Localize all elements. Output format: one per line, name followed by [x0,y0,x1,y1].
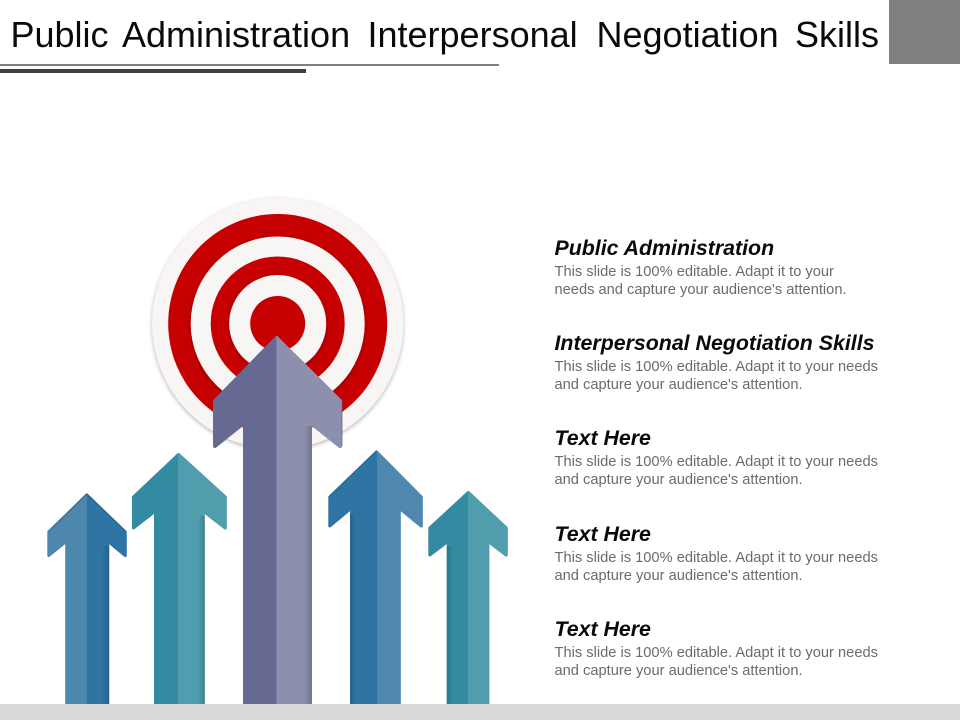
title: Public [10,14,109,55]
target and arrows graphic [47,197,508,704]
text block 5 [554,617,878,679]
corner block [889,0,960,64]
footer bar [0,704,960,720]
icon: target [152,198,403,449]
text block 3: This slide is 100% editable. Adapt it to your needs [554,454,878,470]
title underline thick [0,69,306,73]
text block 1 [554,236,847,298]
text block 1: needs and capture your audience's attention. [554,282,847,298]
text block 4: Text Here [554,522,651,546]
title: Administration [122,14,350,55]
text block 2 [554,331,878,393]
text block 2: Interpersonal Negotiation Skills [554,331,874,355]
text block 5: This slide is 100% editable. Adapt it to your needs [554,645,878,661]
text block 4: and capture your audience's attention. [554,568,803,584]
arrow 5 [430,492,506,704]
text block 2: and capture your audience's attention. [554,377,803,393]
arrow 1 [48,494,126,704]
text block 3: Text Here [554,426,651,450]
text block 5: Text Here [554,617,651,641]
text block 1: Public Administration [554,236,774,260]
text block 5: and capture your audience's attention. [554,663,803,679]
text block 4 [554,522,878,584]
center arrow [215,338,342,704]
arrow 2 [134,454,225,704]
title [10,14,879,55]
arrow 4 [329,451,421,704]
title underline thin [0,64,499,66]
title: Negotiation [596,14,779,55]
text block 3 [554,426,878,488]
text block 4: This slide is 100% editable. Adapt it to your needs [554,550,878,566]
title: Interpersonal [368,14,578,55]
text block 3: and capture your audience's attention. [554,472,803,488]
text block 2: This slide is 100% editable. Adapt it to your needs [554,359,878,375]
text block 1: This slide is 100% editable. Adapt it to your [554,264,834,280]
title: Skills [795,14,879,55]
